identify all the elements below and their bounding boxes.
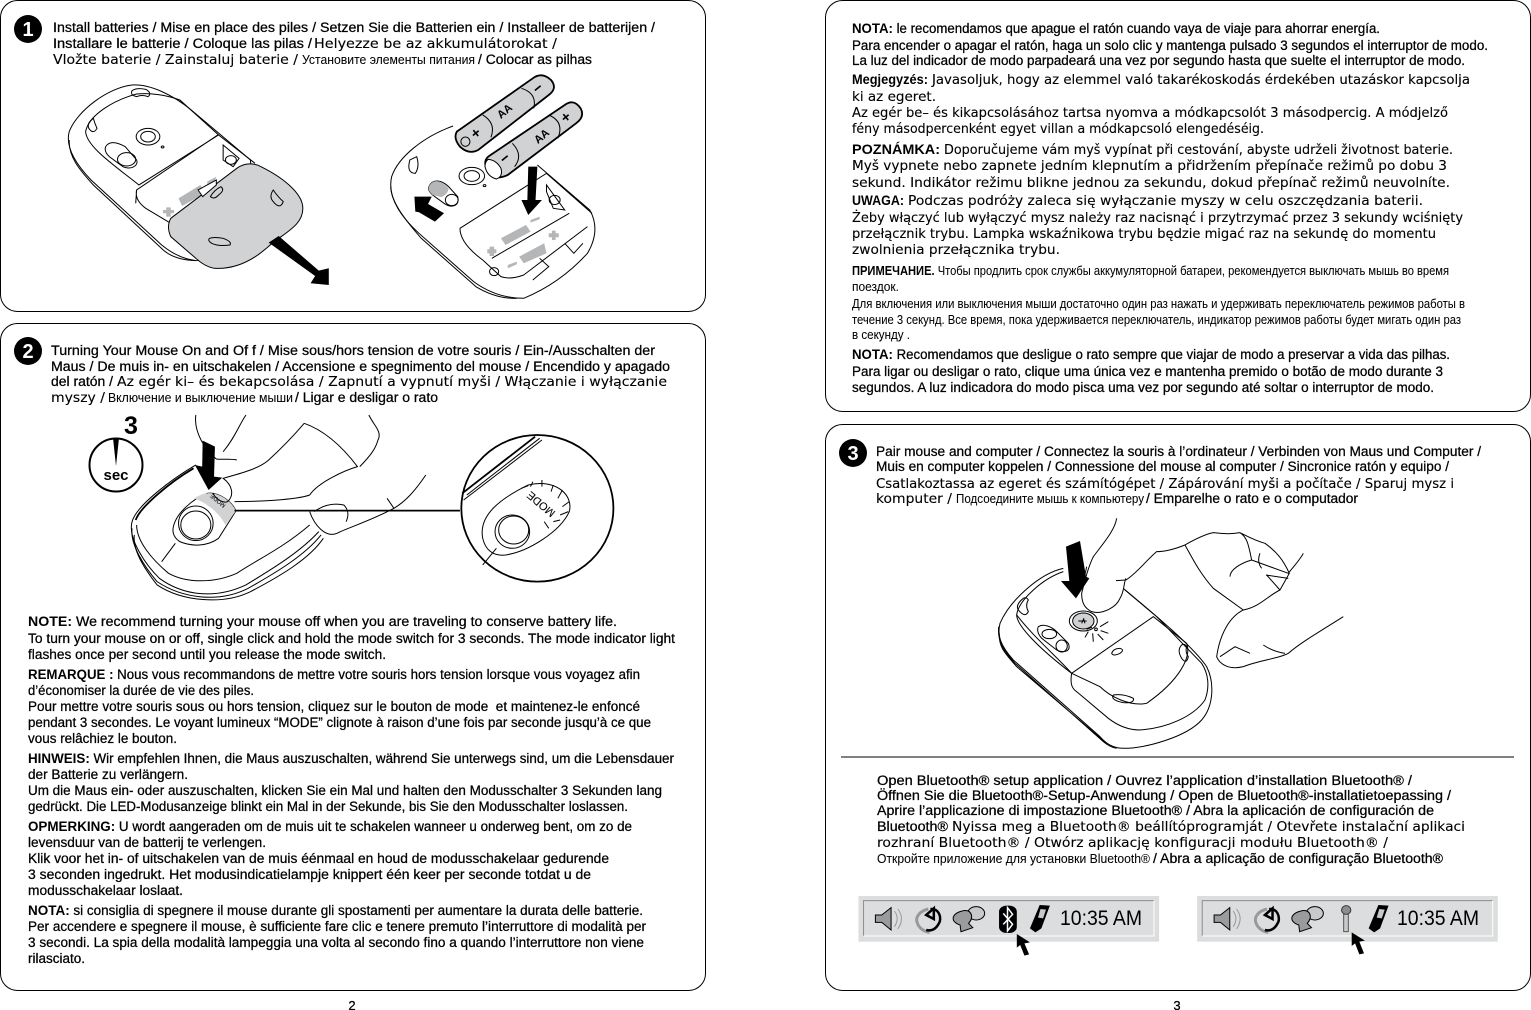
note: English: To turn your mouse on or off, single click and hold the mode switch for 3 seconds. The mode indicator light — [28, 631, 675, 646]
instruction: open Bluetooth setup: Open Bluetooth® setup application / Ouvrez l’application d’installation Bluetooth® / — [877, 773, 1412, 788]
note: Dutch: Klik voor het in- of uitschakelen van de muis éénmaal en houd de modusschakelaar gedurende — [28, 851, 609, 866]
note: Hungarian: fény másodpercenként egyet villan a módkapcsoló elengedéséig. — [852, 121, 1264, 137]
illustration: mouse with battery cover removed — [68, 85, 329, 285]
heading: pair mouse and computer: / Emparelhe o rato e o computador — [1146, 491, 1359, 506]
icon: 3 sec timer — [90, 412, 142, 492]
instruction: open Bluetooth setup — [877, 773, 1465, 866]
note: Czech — [852, 141, 1453, 191]
heading: install batteries: / Colocar as pilhas — [478, 52, 592, 67]
taskbar: antenna icon — [1197, 896, 1498, 954]
taskbar: antenna icon: 10:35 AM — [1397, 907, 1479, 930]
heading: turning your mouse on and off: Turning Your Mouse On and Of f / Mise sous/hors tension de votre souris / Ein-/Ausschalten der — [51, 343, 656, 358]
note: French: vous relâchiez le bouton. — [28, 731, 177, 746]
note: Russian — [852, 263, 1465, 342]
heading: install batteries: Helyezze be az akkumulátorokat / — [314, 36, 557, 52]
heading: turning your mouse on and off: Включение и выключение мыши — [108, 390, 293, 405]
panel: step 2 turning mouse on and off — [0, 324, 706, 990]
instruction: open Bluetooth setup: Bluetooth® — [877, 819, 948, 834]
note: Czech: Myš vypnete nebo zapnete jedním klepnutím a přidržením přepínače režimů po dobu 3 — [852, 158, 1447, 174]
heading: turning your mouse on and off: Az egér ki– és bekapcsolása / Zapnutí a vypnutí myši / Włączanie i wyłączanie — [117, 374, 667, 390]
instruction: open Bluetooth setup: Nyissa meg a Bluetooth® beállítóprogramját / Otevřete instalační aplikaci — [952, 819, 1465, 835]
note: English: NOTE: We recommend turning your mouse off when you are traveling to conserve battery life. — [28, 614, 617, 629]
note: Portuguese — [852, 347, 1450, 395]
heading: pair mouse and computer: Подсоедините мышь к компьютеру — [956, 491, 1144, 506]
battery labels: − — [496, 149, 514, 168]
heading: install batteries — [53, 20, 655, 68]
note: Hungarian — [852, 71, 1470, 137]
mode labels — [210, 488, 558, 519]
note: Russian: ПРИМЕЧАНИЕ. Чтобы продлить срок службы аккумуляторной батареи, рекомендуется выключать мышь во время — [852, 263, 1449, 278]
note: Italian: 3 secondi. La spia della modalità lampeggia una volta al secondo fino a quando l’interruttore non viene — [28, 935, 644, 950]
note: Hungarian: Megjegyzés: — [852, 71, 928, 87]
note: Hungarian: Javasoljuk, hogy az elemmel való takarékoskodás érdekében utazáskor kapcsolja — [931, 72, 1470, 88]
instruction: open Bluetooth setup: Откройте приложение для установки Bluetooth® — [877, 851, 1150, 866]
note: Czech: Doporučujeme vám myš vypínat při cestování, abyste udrželi životnost baterie. — [944, 142, 1453, 158]
note: Dutch: levensduur van de batterij te verlengen. — [28, 835, 266, 850]
heading: pair mouse and computer: Muis en computer koppelen / Connessione del mouse al computer / Sincronice ratón y equipo / — [876, 459, 1449, 474]
battery labels: AA — [532, 127, 552, 146]
note: Spanish: La luz del indicador de modo parpadeará una vez por segundo hasta que suelte el interruptor de modo. — [852, 53, 1465, 68]
note: Spanish — [852, 21, 1488, 68]
heading: turning your mouse on and off — [51, 343, 670, 406]
panel: notes continued — [826, 0, 1530, 412]
taskbar: Bluetooth icon — [858, 896, 1159, 956]
note: Dutch: modusschakelaar loslaat. — [28, 883, 183, 898]
instruction: open Bluetooth setup: Öffnen Sie die Bluetooth®-Setup-Anwendung / Open de Bluetooth®-installatietoepassing / — [877, 788, 1451, 803]
note: French: pendant 3 secondes. Le voyant lumineux “MODE” clignote à raison d’une fois par seconde jusqu’à ce que — [28, 715, 651, 730]
note: Hungarian: ki az egeret. — [852, 89, 936, 105]
icon: 3 sec timer: 3 — [124, 412, 138, 440]
note: Czech: sekund. Indikátor režimu blikne jednou za sekundu, dokud přepínač režimů neuvolníte. — [852, 175, 1450, 191]
panel: step 3 pair mouse and computer — [826, 424, 1530, 990]
note: Italian: Per accendere e spegnere il mouse, è sufficiente fare clic e tenere premuto l’interruttore di modalità per — [28, 919, 647, 934]
note: Dutch: 3 seconden ingedrukt. Het modusindicatielampje knippert één keer per seconde totdat u de — [28, 867, 591, 882]
mode labels: MODE — [525, 488, 558, 519]
battery labels: AA — [495, 102, 515, 121]
note: English — [28, 614, 675, 662]
illustration: finger pressing mode switch — [131, 415, 613, 600]
note: Czech: POZNÁMKA: — [852, 141, 940, 157]
note: Portuguese: NOTA: Recomendamos que desligue o rato sempre que viajar de modo a preservar a vida das pilhas. — [852, 347, 1450, 362]
heading: pair mouse and computer: komputer / — [876, 491, 952, 507]
heading: pair mouse and computer — [876, 444, 1481, 507]
note: Italian: NOTA: si consiglia di spegnere il mouse durante gli spostamenti per aumentare la durata delle batterie. — [28, 903, 643, 918]
instruction: open Bluetooth setup: rozhraní Bluetooth® / Otwórz aplikację konfiguracji modułu Bluetooth® / — [877, 835, 1388, 851]
note: Dutch: OPMERKING: U wordt aangeraden om de muis uit te schakelen wanneer u onderweg bent, om zo de — [28, 819, 632, 834]
note: Italian — [28, 903, 647, 966]
note: Polish: UWAGA: — [852, 192, 904, 208]
mode labels: MODE — [210, 492, 227, 508]
heading: turning your mouse on and off: / Ligar e desligar o rato — [295, 390, 438, 405]
note: Portuguese: Para ligar ou desligar o rato, clique uma única vez e mantenha premido o botão de modo durante 3 — [852, 364, 1443, 379]
heading: turning your mouse on and off: Maus / De muis in- en uitschakelen / Accensione e spegnimento del mouse / Encendido y apagado — [51, 359, 670, 374]
note: Polish: Żeby włączyć lub wyłączyć mysz należy raz nacisnąć i przytrzymać przez 3 sekundy wciśnięty — [852, 208, 1463, 226]
note: Spanish: Para encender o apagar el ratón, haga un solo clic y mantenga pulsado 3 segundos el interruptor de modo. — [852, 38, 1488, 53]
heading: turning your mouse on and off: del ratón / — [51, 374, 113, 389]
badge 2 — [14, 337, 42, 365]
note: French — [28, 667, 651, 746]
heading: install batteries: Установите элементы питания — [302, 52, 475, 67]
heading: pair mouse and computer: Csatlakoztassa az egeret és számítógépet / Zápárování myši a počítače / Sparuj mysz i — [876, 476, 1454, 492]
note: Polish: przełącznik trybu. Lampka wskaźnikowa trybu będzie migać raz na sekundę do momentu — [852, 226, 1436, 242]
note: Russian: в секунду . — [852, 327, 910, 342]
note: German: HINWEIS: Wir empfehlen Ihnen, die Maus auszuschalten, während Sie unterwegs sind, um die Lebensdauer — [28, 751, 674, 766]
note: Hungarian: Az egér be– és kikapcsolásához tartsa nyomva a módkapcsolót 3 másodpercig. A módjelző — [852, 105, 1448, 121]
note: French: d’économiser la durée de vie des piles. — [28, 683, 254, 698]
taskbar: Bluetooth icon: 10:35 AM — [1060, 907, 1142, 930]
note: German: gedrückt. Die LED-Modusanzeige blinkt ein Mal in der Sekunde, bis Sie den Modusschalter loslassen. — [28, 799, 628, 814]
heading: install batteries: Vložte baterie / Zainstaluj baterie / — [53, 52, 298, 68]
note: French: REMARQUE : Nous vous recommandons de mettre votre souris hors tension lorsque vous voyagez afin — [28, 667, 640, 682]
battery labels: + — [467, 124, 485, 143]
note: Polish: Podczas podróży zaleca się wyłączanie myszy w celu oszczędzania baterii. — [908, 193, 1423, 209]
badge 3: 3 — [847, 443, 859, 465]
illustration: finger pressing connect button — [998, 518, 1343, 748]
note: English: flashes once per second until you release the mode switch. — [28, 647, 386, 662]
instruction: open Bluetooth setup: / Abra a aplicação de configuração Bluetooth® — [1153, 851, 1443, 866]
instruction: open Bluetooth setup: Aprire l’applicazione di impostazione Bluetooth® / Abra la aplicación de configuración de — [877, 803, 1434, 818]
icon: 3 sec timer: sec — [103, 467, 129, 484]
batteries — [455, 75, 554, 152]
battery labels — [467, 79, 575, 168]
note: Italian: rilasciato. — [28, 951, 85, 966]
panel: step 1 install batteries — [0, 0, 706, 312]
heading: pair mouse and computer: Pair mouse and computer / Connectez la souris à l’ordinateur / Verbinden von Maus und Computer / — [876, 444, 1481, 459]
badge 3 — [839, 439, 867, 467]
badge 2: 2 — [22, 341, 34, 363]
note: Polish: zwolnienia przełącznika trybu. — [852, 242, 1060, 258]
note: Russian: поездок. — [852, 279, 899, 294]
note: Polish — [852, 192, 1463, 258]
heading: install batteries: Install batteries / Mise en place des piles / Setzen Sie die Batterien ein / Installeer de batterijen / — [53, 20, 655, 35]
note: Portuguese: segundos. A luz indicadora do modo pisca uma vez por segundo até soltar o interruptor de modo. — [852, 380, 1434, 395]
badge 1 — [14, 15, 42, 43]
heading: install batteries: Installare le batterie / Coloque las pilas / — [53, 36, 312, 51]
note: Spanish: NOTA: le recomendamos que apague el ratón cuando vaya de viaje para ahorrar energía. — [852, 21, 1380, 36]
note: French: Pour mettre votre souris sous ou hors tension, cliquez sur le bouton de mode et maintenez-le enfoncé — [28, 699, 640, 714]
note: German: der Batterie zu verlängern. — [28, 767, 188, 782]
heading: turning your mouse on and off: myszy / — [51, 390, 105, 406]
battery labels: + — [557, 108, 575, 127]
note: German: Um die Maus ein- oder auszuschalten, klicken Sie ein Mal und halten den Modusschalter 3 Sekunden lang — [28, 783, 662, 798]
divider line — [841, 756, 1514, 758]
battery labels: − — [529, 79, 547, 98]
illustration: mouse with batteries being inserted — [391, 75, 595, 298]
note: Dutch — [28, 819, 632, 898]
badge 1: 1 — [22, 19, 34, 41]
note: German — [28, 751, 674, 814]
